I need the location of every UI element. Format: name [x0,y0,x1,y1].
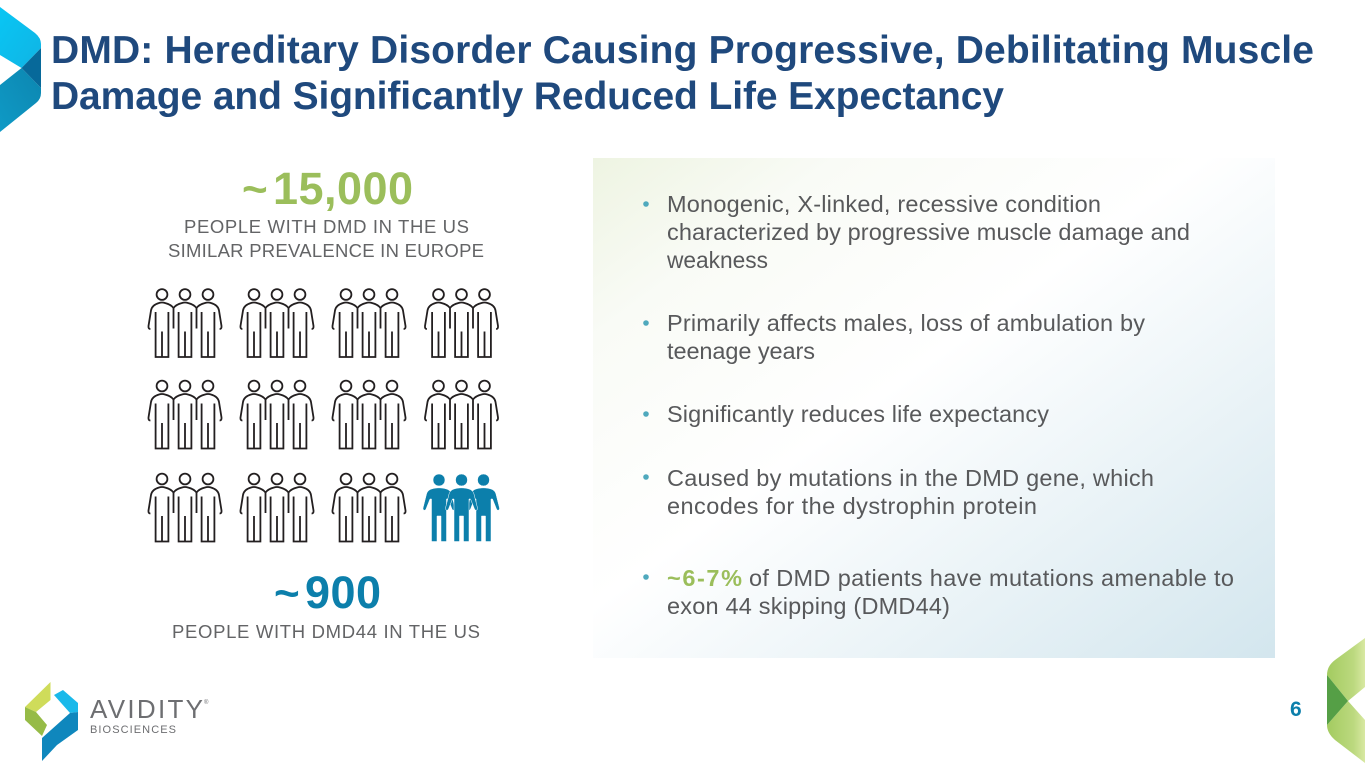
wordmark: AVIDITY [90,694,203,724]
bullet: exon 44: exon 44 skipping (DMD44) [667,593,950,619]
bullet: monogenic [643,191,1190,273]
bullet: mutations: encodes for the dystrophin protein [667,493,1037,519]
stat: about 15,000 people with DMD: ~ [242,165,268,214]
stat: about 15,000 people with DMD: SIMILAR PREVALENCE IN EUROPE [168,240,484,261]
stat: about 900 people with DMD44: ~ [274,569,300,618]
logo: Avidity Biosciences [25,682,209,761]
bullet: monogenic: weakness [666,247,768,273]
bullet: life expectancy: Significantly reduces life expectancy [667,401,1049,427]
page number: 6 [1290,698,1302,721]
bullet: monogenic: Monogenic, X-linked, recessive condition [667,191,1101,217]
stat: about 900 people with DMD44: PEOPLE WITH DMD44 IN THE US [172,621,480,642]
bullet: exon 44: of DMD patients have mutations amenable to [749,565,1234,591]
bullet: mutations [643,465,1154,519]
stat: about 15,000 people with DMD [168,163,484,261]
highlighted group [423,474,500,542]
title: Damage and Significantly Reduced Life Expectancy [51,75,1004,118]
bullet: exon 44: ~6-7% [667,565,742,591]
bullet: males: Primarily affects males, loss of ambulation by [667,310,1145,336]
stat: about 15,000 people with DMD: PEOPLE WITH DMD IN THE US [184,216,469,237]
logo mark: top-left blue ribbon [0,7,41,132]
logo mark: bottom-right green ribbon [1327,638,1365,763]
bullet: monogenic: characterized by progressive muscle damage and [667,219,1190,245]
pictogram: 12 groups of three people, one highlighted [148,289,500,542]
bullet: exon 44 [643,565,1234,619]
bullet: males: teenage years [667,338,815,364]
panel: key facts [593,158,1275,658]
logo: Avidity Biosciences: ® [204,699,209,706]
bullet: males [643,310,1145,364]
stat: about 900 people with DMD44: 900 [305,567,381,618]
logo mark [25,682,78,761]
stat: about 900 people with DMD44 [172,567,480,642]
bullet: mutations: Caused by mutations in the DMD gene, which [667,465,1154,491]
title [51,29,1314,118]
logo: Avidity Biosciences: BIOSCIENCES [90,724,176,736]
stat: about 15,000 people with DMD: 15,000 [273,163,413,214]
title: DMD: Hereditary Disorder Causing Progressive, Debilitating Muscle [51,29,1314,72]
